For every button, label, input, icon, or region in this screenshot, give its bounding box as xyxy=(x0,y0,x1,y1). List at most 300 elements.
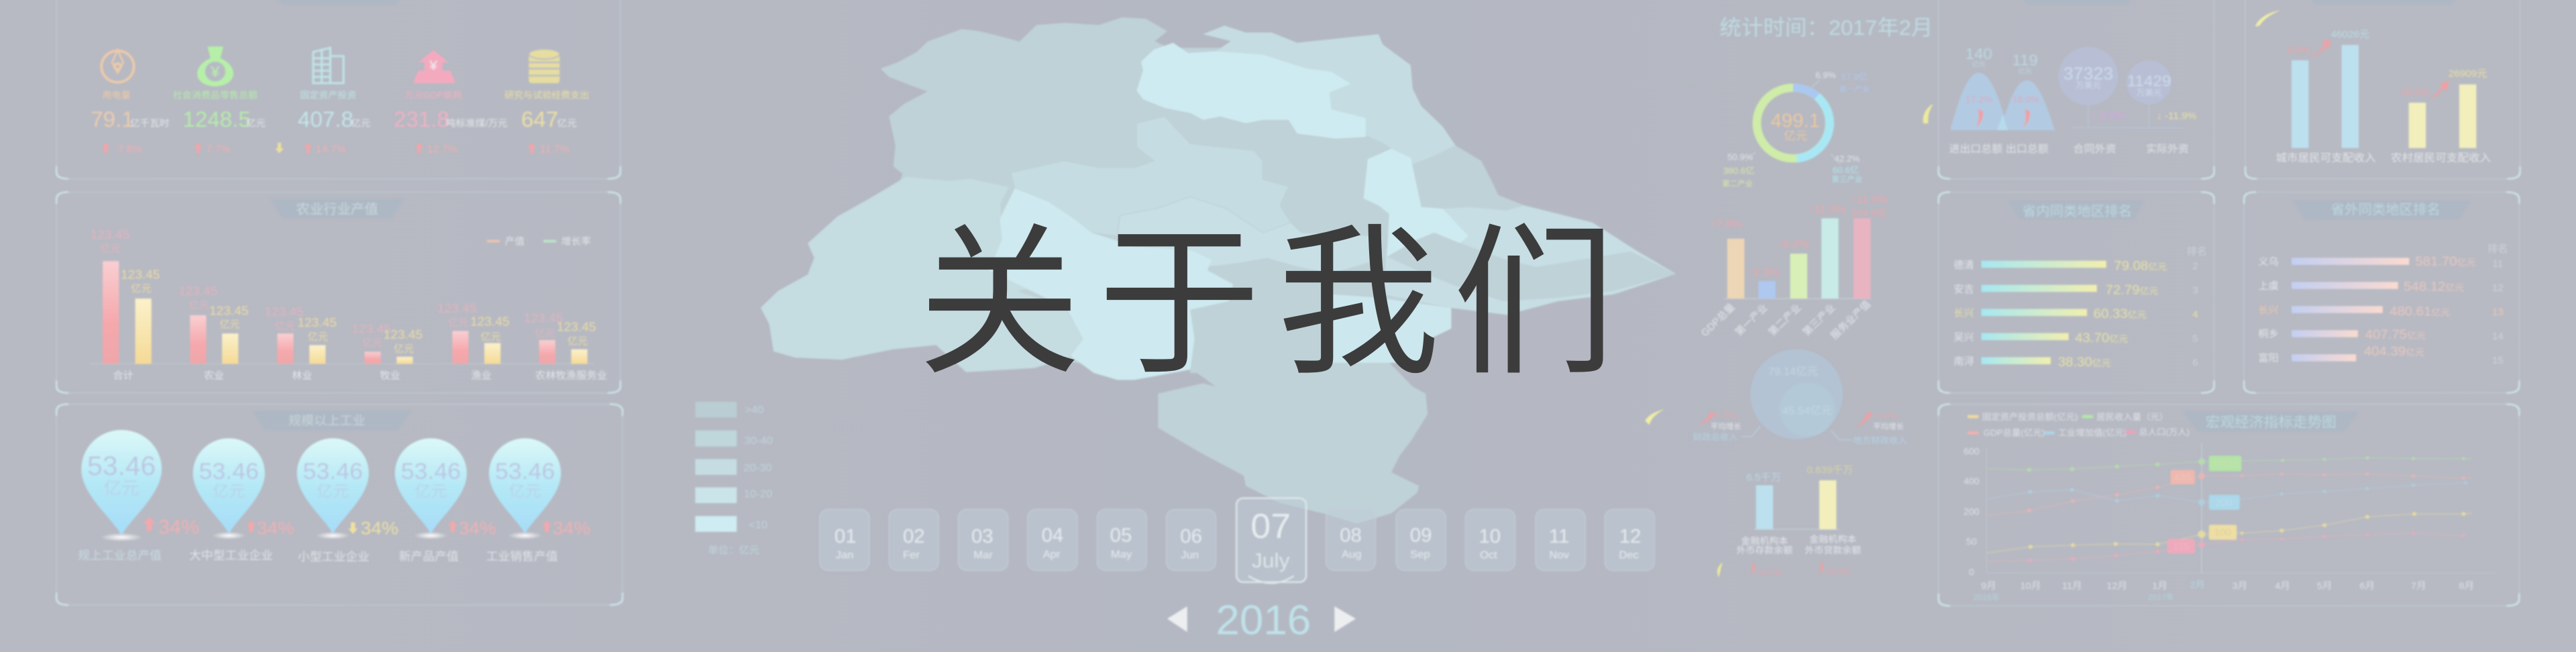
line chart: 5000 xyxy=(2214,458,2237,469)
bar chart: GDP: 第三产业 xyxy=(1800,302,1838,338)
pin: total output: 规上工业总产值 xyxy=(78,549,162,562)
bubble chart: foreign investment: 11429 xyxy=(2127,72,2171,90)
map region: north central dark xyxy=(1165,108,1389,236)
indicator changes: 7.7% xyxy=(206,144,231,155)
bar chart: 亿元 xyxy=(362,337,382,349)
pin: new products: 新产品产值 xyxy=(398,550,459,563)
bar chart: 合计 xyxy=(113,370,133,382)
line chart: 8月 xyxy=(2459,581,2474,592)
trade labels: 出口总额 xyxy=(2006,143,2049,155)
bubble chart: fiscal revenue: 45.54亿元 xyxy=(1782,405,1832,417)
line chart: 600 xyxy=(1964,446,1980,457)
bar chart: GDP: 服务业产值 xyxy=(1829,298,1873,341)
bar chart: GDP xyxy=(1699,193,1888,341)
pin: large and medium enterprises xyxy=(189,438,294,562)
month cards: Aug to Dec: Nov xyxy=(1549,549,1570,561)
donut chart: 499.1 xyxy=(1770,111,1820,132)
indicator values: 亿千瓦时 xyxy=(130,118,170,129)
bar chart: deposits and loans: 金融机构本 xyxy=(1741,535,1788,546)
line chart: 10月 xyxy=(2020,581,2041,592)
bubble chart: foreign investment: ↓ -11.9% xyxy=(2157,110,2196,121)
ranking rows: 14 xyxy=(2492,331,2504,342)
indicator labels xyxy=(102,89,589,100)
line chart: 1月 xyxy=(2152,581,2167,592)
heading tab: foreign trade xyxy=(2019,0,2134,4)
title: 于 xyxy=(1097,213,1261,394)
title xyxy=(918,213,1616,394)
bubble chart: foreign investment xyxy=(2058,47,2196,127)
indicator labels: 万元GDP能耗 xyxy=(405,89,463,100)
indicator changes: 7.8% xyxy=(117,144,142,155)
pin: sales output: 34% xyxy=(553,518,590,538)
bar chart: 123.45 xyxy=(352,322,391,335)
selected month: July xyxy=(1236,498,1306,583)
month labels: May xyxy=(1111,548,1132,560)
bar chart: 亿元 xyxy=(448,317,468,329)
pin: total output: 34% xyxy=(158,517,199,538)
bar chart: 亿元 xyxy=(219,319,240,330)
ranking rows: 长兴 xyxy=(2258,305,2279,316)
ranking rows xyxy=(2258,243,2508,366)
map of regions xyxy=(761,17,1676,524)
panel: out-of-province ranking xyxy=(2244,192,2519,393)
line chart: 2016年 xyxy=(1974,593,2000,602)
map legend: 单位：亿元 xyxy=(708,545,759,556)
indicator changes: 14.7% xyxy=(316,144,346,155)
ranking rows: 义乌 xyxy=(2258,256,2279,268)
indicator changes: 12.7% xyxy=(427,144,458,155)
pin: small enterprises: 53.46 xyxy=(303,459,363,484)
bar chart: 123.45 xyxy=(264,305,304,319)
icon: coin stack xyxy=(529,49,559,83)
bar chart: 123.45 xyxy=(209,304,248,317)
icon: money bag: ¥ xyxy=(210,64,220,80)
heading tab: disposable income xyxy=(2308,0,2457,4)
icon: yellow crescent trade xyxy=(1923,104,1933,123)
map region: south xyxy=(1158,356,1428,524)
map legend and timeline xyxy=(695,402,1356,643)
line chart legend: 工业增加值(亿元) xyxy=(2058,428,2127,438)
line chart: 3月 xyxy=(2232,581,2247,592)
pin: new products: 34% xyxy=(459,518,496,538)
ranking rows: 12 xyxy=(2492,282,2504,294)
ranking rows: 79.08亿元 xyxy=(2114,259,2167,273)
icon: office building xyxy=(313,48,343,83)
month labels: Jun xyxy=(1181,549,1199,561)
heading: in-province ranking: 省内同类地区排名 xyxy=(2023,204,2132,219)
pin: new products: 53.46 xyxy=(401,459,461,484)
ranking rows: 72.79亿元 xyxy=(2105,283,2159,297)
mountain chart xyxy=(1950,45,2055,130)
bubble chart: fiscal revenue: 7.7% xyxy=(1716,411,1736,421)
bar chart: 123.45 xyxy=(121,268,160,281)
line chart: 4月 xyxy=(2275,581,2290,592)
map region: northwest xyxy=(881,17,1184,187)
pin: sales output xyxy=(486,438,590,563)
ranking rows: 15 xyxy=(2492,355,2504,366)
bar chart: deposits and loans: 外币贷款余额 xyxy=(1805,545,1862,555)
bubble chart: fiscal revenue: 地方财政收入 xyxy=(1853,435,1907,445)
panel: macro economic trends xyxy=(1939,404,2519,606)
map legend: >40 xyxy=(745,404,763,416)
donut chart: 57.9亿 xyxy=(1841,72,1868,82)
bar chart: 123.45 xyxy=(178,284,218,298)
ranking rows: 南浔 xyxy=(1953,356,1974,368)
ranking rows: 480.61亿元 xyxy=(2390,305,2451,319)
indicator values: 1248.5 xyxy=(182,107,251,131)
map region: central mid xyxy=(1010,116,1291,236)
bar chart: deposits and loans: 0.639千万 xyxy=(1807,465,1853,476)
line chart: 2017年 xyxy=(2148,593,2174,602)
map region: southwest xyxy=(761,176,1083,372)
line chart: 2月 xyxy=(2190,580,2205,590)
mountain chart: 16.0% xyxy=(2012,94,2039,105)
ranking rows: 6 xyxy=(2192,358,2198,368)
ranking rows: 吴兴 xyxy=(1953,332,1974,343)
bar chart: GDP: ↑11.0% xyxy=(1808,203,1845,215)
pin: small enterprises: 亿元 xyxy=(317,482,349,500)
donut chart: 380.6亿 xyxy=(1723,166,1754,176)
ranking rows: 德清 xyxy=(1953,259,1974,271)
donut chart: 第二产业 xyxy=(1722,179,1753,188)
month cards: Aug to Dec: Oct xyxy=(1480,549,1497,561)
donut chart: 6.9% xyxy=(1815,70,1836,80)
panel: industry above scale xyxy=(56,404,623,605)
map legend: 30-40 xyxy=(745,435,773,447)
month labels: 01 xyxy=(835,526,857,547)
panel: foreign trade xyxy=(1923,0,2214,179)
statistics date: 统计时间：2017年2月 xyxy=(1719,15,1933,40)
indicator values: 647 xyxy=(521,107,558,131)
map region: east light xyxy=(1364,149,1468,257)
map region: central dark xyxy=(1134,178,1391,373)
icon: yellow crescent map xyxy=(1645,409,1665,425)
bar chart: deposits and loans: 13.7% xyxy=(1757,568,1782,578)
bar chart: 牧业 xyxy=(380,370,400,382)
bubble chart: fiscal revenue: 79.14亿元 xyxy=(1768,366,1818,378)
bar chart: GDP: 第二产业 xyxy=(1766,302,1804,338)
ranking rows: 安吉 xyxy=(1953,284,1974,295)
line chart: 200 xyxy=(1964,506,1980,517)
bar chart: GDP: ↑2.3% xyxy=(1748,266,1780,279)
indicator values: 407.8 xyxy=(298,107,354,131)
month cards: Aug to Dec: Aug xyxy=(1342,548,1362,560)
icon: yellow crescent upper xyxy=(1925,104,1933,124)
bar chart: income xyxy=(2275,29,2491,164)
bar chart: deposits and loans xyxy=(1736,465,1862,578)
month labels: 06 xyxy=(1180,526,1202,547)
legend: 产值 xyxy=(505,236,525,247)
pin: large and medium enterprises: 34% xyxy=(257,518,294,538)
indicator labels: 社会消费品零售总额 xyxy=(173,89,258,100)
month cards xyxy=(820,509,1216,571)
bar chart: GDP: ↑7.8% xyxy=(1710,218,1742,231)
month cards: Aug to Dec: 11 xyxy=(1549,526,1569,547)
line chart: 9月 xyxy=(1981,581,1996,592)
bar chart: GDP: ↑6.2% xyxy=(1777,237,1809,250)
bar chart: 亿元 xyxy=(535,328,555,339)
line chart: 435 xyxy=(2174,472,2191,484)
selected month: July: 07 xyxy=(1250,507,1291,546)
ranking rows: 11 xyxy=(2492,258,2503,270)
pin: small enterprises: 34% xyxy=(361,518,398,538)
ranking rows: 上虞 xyxy=(2258,280,2279,292)
heading: agriculture output xyxy=(270,199,405,218)
indicator values: 吨标准煤/万元 xyxy=(446,118,508,129)
ranking rows: 2 xyxy=(2192,261,2198,272)
ranking rows xyxy=(1953,246,2207,370)
panel: agriculture output xyxy=(56,192,621,393)
ranking rows: 38.30亿元 xyxy=(2058,355,2111,370)
month cards: Aug to Dec: Dec xyxy=(1619,549,1639,561)
line chart legend: 固定资产投资总额(亿元) xyxy=(1982,412,2078,422)
bubble chart: foreign investment: ↑ 5.6% xyxy=(2091,109,2125,121)
bar chart: income: 26909元 xyxy=(2449,68,2487,80)
indicator changes: 11.7% xyxy=(540,144,570,155)
pin: new products xyxy=(395,438,496,563)
icon: power meter xyxy=(101,50,134,83)
line chart: 400 xyxy=(1964,476,1980,486)
map legend: 10-20 xyxy=(744,488,772,500)
donut chart: 第一产业 xyxy=(1839,85,1870,93)
bar chart: deposits and loans: 外币存款余额 xyxy=(1736,545,1793,555)
bubble chart: fiscal revenue: 财政总收入 xyxy=(1693,432,1737,442)
map region: north light xyxy=(1137,43,1366,139)
ranking rows: 3 xyxy=(2192,285,2198,296)
month labels: Fer xyxy=(903,549,920,561)
month labels: 03 xyxy=(971,526,994,547)
heading: macro economic trends xyxy=(2184,412,2359,431)
selected month: July: July xyxy=(1252,549,1290,572)
month labels: Jan xyxy=(836,549,853,561)
icon: house with currency xyxy=(413,50,455,83)
ranking rows: 407.75亿元 xyxy=(2365,327,2426,342)
bar chart: 123.45 xyxy=(524,311,563,325)
line chart: 11月 xyxy=(2062,581,2082,592)
bar chart: 亿元 xyxy=(100,243,121,255)
title: 关 xyxy=(918,213,1081,394)
pin: large and medium enterprises: 53.46 xyxy=(199,459,259,484)
indicator changes xyxy=(101,143,570,155)
heading tab: key indicators xyxy=(274,0,402,4)
bar chart: 123.45 xyxy=(297,315,337,329)
month cards: Aug to Dec: 09 xyxy=(1410,525,1432,547)
title: 们 xyxy=(1452,213,1616,394)
heading: industry above scale: 规模以上工业 xyxy=(288,414,366,427)
month labels: 05 xyxy=(1110,525,1132,547)
ranking rows: 581.70亿元 xyxy=(2415,254,2476,269)
line chart: 12月 xyxy=(2106,581,2127,592)
bar chart: GDP: 234.9亿 xyxy=(1851,208,1887,219)
bar chart: 123.45 xyxy=(91,227,129,241)
line chart: 0 xyxy=(1969,567,1974,577)
title: 我 xyxy=(1277,213,1440,394)
panel: key indicators xyxy=(56,0,621,179)
indicator labels: 固定资产投资 xyxy=(300,89,356,100)
bar chart: 123.45 xyxy=(557,320,596,333)
ranking rows: 5 xyxy=(2192,333,2198,345)
left column panels xyxy=(56,0,623,605)
bar chart: income: 46026元 xyxy=(2330,29,2369,40)
line chart: 115 xyxy=(2173,541,2190,552)
icon: money bag xyxy=(197,46,233,87)
bar chart: 亿元 xyxy=(394,343,414,355)
bar chart: GDP: 第一产业 xyxy=(1733,302,1770,338)
donut chart xyxy=(1722,70,1870,188)
bubble chart: fiscal revenue: 0.1% xyxy=(1876,411,1897,421)
mountain chart: 119 xyxy=(2012,52,2038,69)
bar chart: 亿元 xyxy=(189,300,209,311)
line chart: 100 xyxy=(2214,527,2231,538)
trade labels: 合同外资 xyxy=(2074,143,2116,155)
bubble chart: foreign investment: 万美元 xyxy=(2076,81,2102,90)
legend xyxy=(487,236,591,247)
indicator values: 亿元 xyxy=(557,118,577,129)
ranking rows: 404.39亿元 xyxy=(2364,344,2424,359)
month labels: Mar xyxy=(973,549,993,561)
ranking rows: 桐乡 xyxy=(2258,329,2279,340)
legend: 增长率 xyxy=(561,236,591,247)
map legend xyxy=(695,402,773,556)
map region: southwest light xyxy=(989,188,1233,380)
ranking rows: 43.70亿元 xyxy=(2075,331,2128,345)
indicator labels: 研究与试验经费支出 xyxy=(504,89,589,100)
bubble chart: fiscal revenue xyxy=(1693,349,1907,445)
ranking rows: 排名 xyxy=(2187,246,2207,257)
line chart legend: GDP总量(亿元) xyxy=(1984,428,2045,438)
line chart xyxy=(1964,443,2496,602)
month labels xyxy=(835,525,1202,561)
pin: sales output: 亿元 xyxy=(508,482,541,500)
indicator values: 亿元 xyxy=(351,118,370,129)
ranking rows: 13 xyxy=(2492,307,2504,318)
map region: east dark xyxy=(1387,233,1676,301)
indicator values: 亿元 xyxy=(246,118,266,129)
month cards: Aug to Dec: 12 xyxy=(1619,526,1641,547)
heading: out-of-province ranking: 省外同类地区排名 xyxy=(2331,203,2440,217)
line chart legend xyxy=(1967,412,2190,438)
line chart: 200 xyxy=(2215,497,2233,508)
ranking rows: 60.33亿元 xyxy=(2094,307,2147,321)
bar chart: 农林牧渔服务业 xyxy=(535,370,607,382)
line chart: 7月 xyxy=(2411,581,2426,592)
mountain chart: 140 xyxy=(1965,45,1992,63)
heading: industry above scale xyxy=(252,411,411,431)
indicator values: 231.8 xyxy=(394,107,449,131)
pin: sales output: 工业销售产值 xyxy=(486,550,558,563)
month cards: Aug to Dec: 08 xyxy=(1340,525,1362,547)
map region: coast north xyxy=(1413,146,1524,211)
bar chart: income: 城市居民可支配收入 xyxy=(2275,152,2376,164)
map region: coast strip xyxy=(1383,205,1676,315)
pin: total output: 亿元 xyxy=(103,478,140,498)
bar chart: 123.45 xyxy=(437,301,476,315)
pin: large and medium enterprises: 亿元 xyxy=(213,482,245,500)
bar chart: income: 9.6% xyxy=(2287,45,2310,56)
bar chart: 亿元 xyxy=(480,331,501,343)
bubble chart: fiscal revenue: 平均增长 xyxy=(1711,422,1741,431)
month labels: Apr xyxy=(1043,548,1061,560)
mountain chart: 17.2% xyxy=(1966,94,1992,105)
bubble chart: foreign investment: 万美元 xyxy=(2136,89,2162,98)
bar chart xyxy=(90,227,607,382)
pin: new products: 亿元 xyxy=(415,482,447,500)
line chart legend: 总人口(万人) xyxy=(2139,427,2190,437)
bar chart: 亿元 xyxy=(274,321,295,332)
icon: house with currency: ¥ xyxy=(429,58,438,73)
bar chart: income: 10.0% xyxy=(2401,87,2430,98)
bar chart: 123.45 xyxy=(384,327,423,341)
line chart: 6月 xyxy=(2359,581,2375,592)
ranking rows: 排名 xyxy=(2487,243,2508,255)
bar chart: deposits and loans: 10.0% xyxy=(1825,567,1850,576)
donut chart: 60.6亿 xyxy=(1833,165,1859,175)
ranking rows: 548.12亿元 xyxy=(2404,280,2465,294)
bar chart: 亿元 xyxy=(131,283,152,294)
indicator labels: 用电量 xyxy=(102,89,131,100)
bar chart: GDP: ↑11.0% xyxy=(1850,193,1888,206)
icon: yellow crescent income xyxy=(2255,10,2281,27)
bar chart: 渔业 xyxy=(471,370,492,382)
month cards: Aug to Dec xyxy=(1326,509,1654,571)
panel: disposable income xyxy=(2245,0,2520,179)
far right panels xyxy=(1923,0,2520,606)
map legend: <10 xyxy=(749,519,767,531)
map legend: 20-30 xyxy=(743,462,772,474)
icon: yellow crescent low xyxy=(1717,562,1723,577)
pin: total output xyxy=(78,430,199,562)
trade labels xyxy=(1949,143,2189,155)
line chart: 50 xyxy=(1966,536,1977,547)
month labels: 02 xyxy=(903,526,925,547)
heading: macro economic trends: 宏观经济指标走势图 xyxy=(2206,415,2337,431)
bar chart: deposits and loans: 金融机构本 xyxy=(1809,534,1857,544)
donut chart: 42.2% xyxy=(1834,154,1860,164)
map region: northeast mid xyxy=(1203,25,1456,164)
bar chart: 亿元 xyxy=(308,331,328,343)
pin: small enterprises: 小型工业企业 xyxy=(298,550,370,563)
bar chart: GDP: GDP总量 xyxy=(1699,301,1737,339)
donut chart: 第三产业 xyxy=(1831,174,1862,184)
month cards: Aug to Dec: 10 xyxy=(1479,526,1501,547)
heading: out-of-province ranking xyxy=(2292,201,2471,219)
line chart legend: 居民收入量（元） xyxy=(2096,412,2168,422)
pin: small enterprises xyxy=(297,438,398,563)
heading: in-province ranking xyxy=(2008,201,2144,219)
ranking rows: 长兴 xyxy=(1953,308,1974,319)
bubble chart: fiscal revenue: 平均增长 xyxy=(1873,422,1904,431)
mountain chart: 亿元 xyxy=(2018,67,2032,76)
ranking rows: 富阳 xyxy=(2258,352,2279,364)
trade labels: 实际外资 xyxy=(2146,143,2189,155)
heading: agriculture output: 农业行业产值 xyxy=(296,202,378,217)
bubble chart: foreign investment: 37323 xyxy=(2063,64,2113,83)
month labels: 04 xyxy=(1042,525,1063,547)
donut chart: 50.9% xyxy=(1727,152,1753,162)
indicator values xyxy=(91,107,577,131)
mountain chart: 亿元 xyxy=(1972,60,1986,68)
map base fill xyxy=(878,38,1605,373)
year selector: 2016 xyxy=(1216,597,1311,643)
donut chart: 亿元 xyxy=(1784,129,1808,142)
bar chart: 亿元 xyxy=(568,335,588,347)
line chart: 5月 xyxy=(2317,581,2332,592)
bar chart: income: 农村居民可支配收入 xyxy=(2391,152,2491,164)
bar chart: deposits and loans: 6.5千万 xyxy=(1746,472,1781,484)
bar chart: 农业 xyxy=(204,370,224,382)
pin: sales output: 53.46 xyxy=(495,459,555,484)
trade labels: 进出口总额 xyxy=(1949,143,2002,155)
